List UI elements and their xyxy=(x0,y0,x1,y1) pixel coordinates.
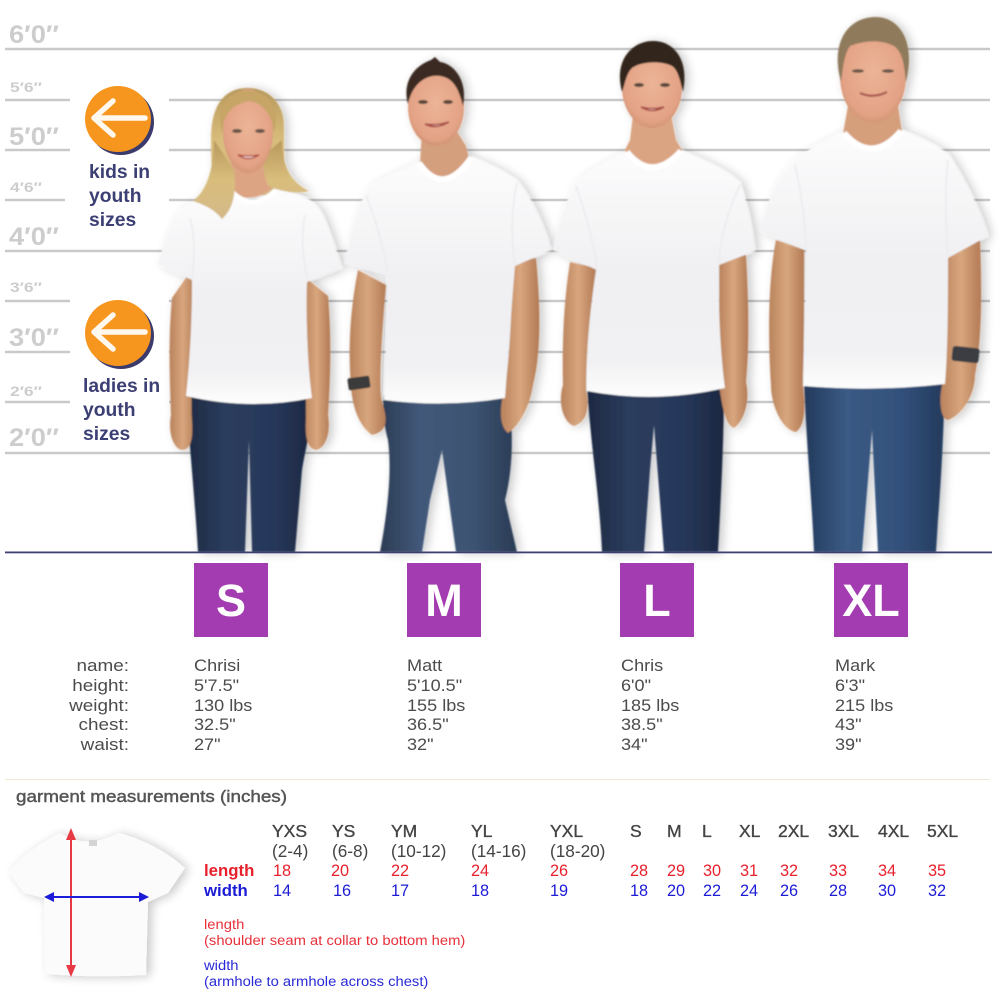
height labels: 3′6″ xyxy=(10,279,42,295)
callout text: kids: youth xyxy=(89,186,141,207)
size table: header: M xyxy=(667,821,682,841)
height labels: 4′0″ xyxy=(9,223,59,251)
person: Chris, size L xyxy=(553,41,755,552)
icon: orange left arrow xyxy=(85,86,154,155)
stats: Chrisi xyxy=(194,656,253,754)
size table: header: YXL xyxy=(550,821,583,841)
stats: Chrisi: 32.5" xyxy=(194,715,236,734)
size table: length row: 33 xyxy=(829,862,847,880)
stats: Chris: Chris xyxy=(621,656,664,675)
size badge: L: L xyxy=(643,575,671,626)
model stat labels xyxy=(68,656,129,754)
size table: header: (10-12) xyxy=(391,841,446,861)
height labels: 2′6″ xyxy=(10,383,42,399)
stats: Mark: 39" xyxy=(835,735,862,754)
size table: length row: 32 xyxy=(780,862,798,880)
legend: width: (armhole to armhole across chest) xyxy=(204,974,428,990)
height labels: 2′0″ xyxy=(9,424,59,452)
person: Chrisi, size S xyxy=(158,88,342,552)
callout text: kids: sizes xyxy=(89,210,136,231)
callout text: kids xyxy=(89,162,150,231)
stats: Matt: Matt xyxy=(407,656,442,675)
size table: header: (14-16) xyxy=(471,841,526,861)
size table: header: (2-4) xyxy=(272,841,308,861)
stats: Mark: 43" xyxy=(835,715,862,734)
stats: Chris: 185 lbs xyxy=(621,696,680,715)
icon: neck label xyxy=(89,840,97,846)
size table: header: (6-8) xyxy=(332,841,368,861)
stats: Mark: 6'3" xyxy=(835,676,865,695)
size table: width row: width xyxy=(203,881,248,900)
size table: header: (18-20) xyxy=(550,841,605,861)
stats: Matt: 32" xyxy=(407,735,434,754)
model stat labels: height: xyxy=(72,676,129,695)
size badge: XL xyxy=(834,563,908,637)
stats: Chris: 6'0" xyxy=(621,676,651,695)
stats: Chris: 34" xyxy=(621,735,648,754)
size table: header: 4XL xyxy=(878,821,909,841)
size table: header: YS xyxy=(332,821,355,841)
legend: length: (shoulder seam at collar to bottom hem) xyxy=(204,933,465,949)
height labels: 5′0″ xyxy=(9,123,59,151)
model stat labels: waist: xyxy=(80,735,129,754)
size table: width row: 19 xyxy=(550,882,568,900)
height labels xyxy=(9,21,59,452)
height labels: 5′6″ xyxy=(10,79,42,95)
height chart lines xyxy=(5,49,990,453)
stats: Chris: 38.5" xyxy=(621,715,663,734)
legend: width: width xyxy=(203,958,239,974)
callout text: ladies xyxy=(83,376,160,445)
person: Mark, size XL xyxy=(760,17,988,552)
size table: length row: 30 xyxy=(703,862,721,880)
size table: header: L xyxy=(702,821,712,841)
model stat labels: name: xyxy=(76,656,129,675)
stats: Matt: 155 lbs xyxy=(407,696,466,715)
size table: width row: 24 xyxy=(740,882,758,900)
size badge: S xyxy=(194,563,268,637)
icon: orange left arrow xyxy=(85,300,154,369)
size table: width row xyxy=(203,881,946,900)
model stat labels: weight: xyxy=(68,696,129,715)
size table: width row: 16 xyxy=(333,882,351,900)
callout: ladies in youth sizes xyxy=(83,300,160,445)
stats: Matt: 36.5" xyxy=(407,715,449,734)
size table: width row: 30 xyxy=(878,882,896,900)
size table: width row: 26 xyxy=(780,882,798,900)
heading: garment measurements: garment measurements (inches) xyxy=(16,787,287,806)
stats: Matt xyxy=(407,656,466,754)
stats: Matt: 5'10.5" xyxy=(407,676,462,695)
size table: header: 3XL xyxy=(828,821,859,841)
size table: length row: 28 xyxy=(630,862,648,880)
height labels: 4′6″ xyxy=(10,179,42,195)
height labels: 6′0″ xyxy=(9,21,59,49)
size table: width row: 32 xyxy=(928,882,946,900)
size table: header: YL xyxy=(471,821,493,841)
stats: Chrisi: 130 lbs xyxy=(194,696,253,715)
stats: Chris xyxy=(621,656,680,754)
stats: Chrisi: 5'7.5" xyxy=(194,676,239,695)
stats: Mark: 215 lbs xyxy=(835,696,894,715)
size badge: S: S xyxy=(216,575,246,626)
size badge: XL: XL xyxy=(842,575,900,626)
legend: length xyxy=(204,917,465,949)
size table: length row: 34 xyxy=(878,862,896,880)
size table: width row: 20 xyxy=(667,882,685,900)
diagram: t-shirt with measurement arrows xyxy=(9,828,185,977)
size badge: L xyxy=(620,563,694,637)
baseline rule xyxy=(5,552,992,553)
callout text: ladies: sizes xyxy=(83,424,130,445)
callout text: ladies: ladies in xyxy=(83,376,160,397)
size table: length row: 18 xyxy=(273,862,291,880)
size table: width row: 18 xyxy=(471,882,489,900)
size badge: M: M xyxy=(425,575,463,626)
stats: Chrisi: Chrisi xyxy=(194,656,240,675)
size table: length row xyxy=(204,861,946,880)
person: Matt, size M xyxy=(344,57,551,552)
size table: header: YXS xyxy=(272,821,307,841)
stats: Mark: Mark xyxy=(835,656,876,675)
legend: length: length xyxy=(204,917,244,933)
height labels: 3′0″ xyxy=(9,324,59,352)
size table: length row: length xyxy=(204,861,254,880)
size table: header xyxy=(272,821,958,861)
size table: width row: 28 xyxy=(829,882,847,900)
callout: kids in youth sizes xyxy=(85,86,154,231)
size table: header: XL xyxy=(739,821,761,841)
callout text: kids: kids in xyxy=(89,162,150,183)
size table: length row: 31 xyxy=(740,862,758,880)
size table: header: YM xyxy=(391,821,417,841)
size table: length row: 29 xyxy=(667,862,685,880)
size table: width row: 14 xyxy=(273,882,291,900)
arrow: length xyxy=(66,828,76,977)
callout text: ladies: youth xyxy=(83,400,135,421)
size table: width row: 18 xyxy=(630,882,648,900)
size table: header: 5XL xyxy=(927,821,958,841)
stats: Chrisi: 27" xyxy=(194,735,221,754)
size table: header: 2XL xyxy=(778,821,809,841)
size badge: M xyxy=(407,563,481,637)
size table: length row: 35 xyxy=(928,862,946,880)
stats: Mark xyxy=(835,656,894,754)
size table: length row: 22 xyxy=(391,862,409,880)
size table: width row: 17 xyxy=(391,882,409,900)
model stat labels: chest: xyxy=(79,715,129,734)
size table: length row: 24 xyxy=(471,862,489,880)
arrow: width xyxy=(44,892,149,902)
legend: width xyxy=(203,958,428,990)
size table: length row: 20 xyxy=(331,862,349,880)
size table: header: S xyxy=(630,821,642,841)
size table: width row: 22 xyxy=(703,882,721,900)
size table: length row: 26 xyxy=(550,862,568,880)
icon: flat white t-shirt xyxy=(9,833,185,976)
